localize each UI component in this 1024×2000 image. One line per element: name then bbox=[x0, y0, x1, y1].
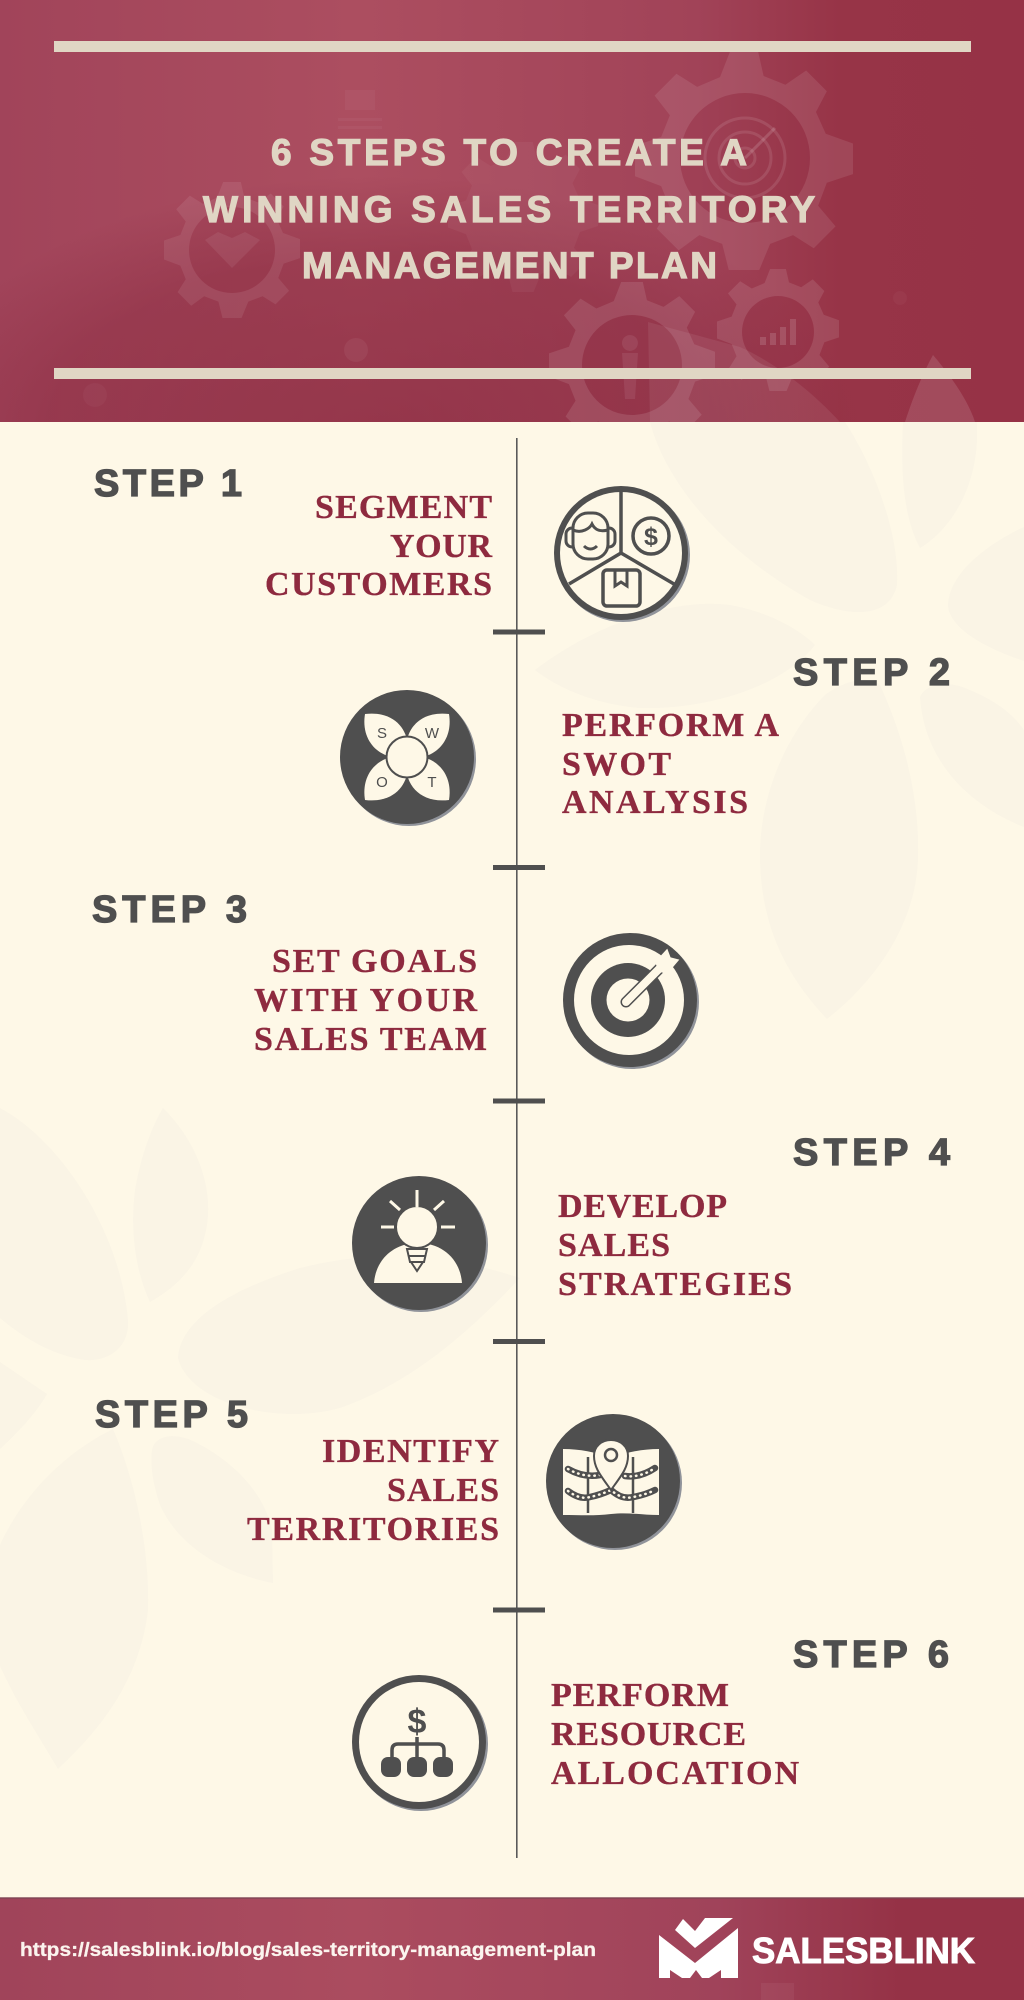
step 4 heading: DEVELOP bbox=[558, 1188, 727, 1225]
step 3 heading bbox=[254, 943, 487, 1058]
step 4 heading bbox=[558, 1188, 792, 1303]
icon: SWOT flower: S bbox=[377, 725, 387, 742]
step 2 label: STEP 2 bbox=[793, 652, 950, 694]
icon: target with arrow bbox=[563, 933, 699, 1069]
step 6 heading: RESOURCE bbox=[551, 1716, 746, 1753]
step 2 heading: SWOT bbox=[562, 746, 671, 783]
title: 6 STEPS TO CREATE A bbox=[271, 132, 747, 173]
icon: SWOT flower bbox=[340, 690, 476, 826]
step 6 label: STEP 6 bbox=[793, 1634, 949, 1676]
background leaves: upper right bbox=[535, 422, 1024, 1019]
step 3 heading: SET GOALS bbox=[272, 943, 477, 980]
logo wordmark: SALESBLINK bbox=[752, 1930, 975, 1971]
icon: lightbulb head bbox=[352, 1176, 488, 1312]
step 4 label: STEP 4 bbox=[793, 1132, 950, 1174]
title: MANAGEMENT PLAN bbox=[302, 245, 717, 286]
icon: resource allocation: $ bbox=[408, 1703, 427, 1741]
step 3 heading: SALES TEAM bbox=[254, 1021, 487, 1058]
leaf tips over header bbox=[905, 355, 975, 422]
step 1 label: STEP 1 bbox=[94, 463, 242, 505]
header rules bbox=[54, 41, 971, 52]
title bbox=[203, 132, 815, 286]
icon: customer segments bbox=[554, 486, 690, 622]
step 2 heading: PERFORM A bbox=[562, 707, 779, 744]
icon: SWOT flower: W bbox=[425, 725, 440, 742]
header gear decorations bbox=[83, 52, 975, 448]
step 1 heading: SEGMENT bbox=[315, 489, 492, 526]
step 4 heading: STRATEGIES bbox=[558, 1266, 792, 1303]
step 5 label: STEP 5 bbox=[95, 1394, 248, 1436]
title: WINNING SALES TERRITORY bbox=[203, 189, 815, 230]
step 3 label: STEP 3 bbox=[92, 889, 247, 931]
step 1 heading bbox=[265, 489, 492, 603]
icon: SWOT flower: O bbox=[376, 774, 388, 791]
step 2 heading bbox=[562, 707, 779, 821]
step 2 heading: ANALYSIS bbox=[562, 784, 748, 821]
icon: customer segments: $ bbox=[644, 523, 658, 551]
step 6 heading: PERFORM bbox=[551, 1677, 729, 1714]
background leaves: lower left bbox=[0, 1108, 520, 1769]
step 5 heading bbox=[247, 1433, 499, 1548]
step 5 heading: SALES bbox=[387, 1472, 499, 1509]
step 5 heading: IDENTIFY bbox=[322, 1433, 499, 1470]
icon: resource allocation bbox=[352, 1675, 488, 1811]
step 1 heading: CUSTOMERS bbox=[265, 566, 492, 603]
step 3 heading: WITH YOUR bbox=[254, 982, 477, 1019]
icon: SWOT flower: T bbox=[427, 774, 437, 791]
step 6 heading bbox=[551, 1677, 799, 1792]
step 5 heading: TERRITORIES bbox=[247, 1511, 499, 1548]
footer url: https://salesblink.io/blog/sales-territory-management-plan bbox=[20, 1939, 596, 1961]
step 1 heading: YOUR bbox=[390, 528, 492, 565]
timeline spine bbox=[493, 438, 545, 1858]
step 6 heading: ALLOCATION bbox=[551, 1755, 799, 1792]
logo mark bbox=[659, 1918, 738, 1978]
footer band bbox=[0, 1897, 1024, 2000]
header band bbox=[0, 0, 1024, 448]
icon: map with pin bbox=[546, 1414, 682, 1550]
step 4 heading: SALES bbox=[558, 1227, 670, 1264]
